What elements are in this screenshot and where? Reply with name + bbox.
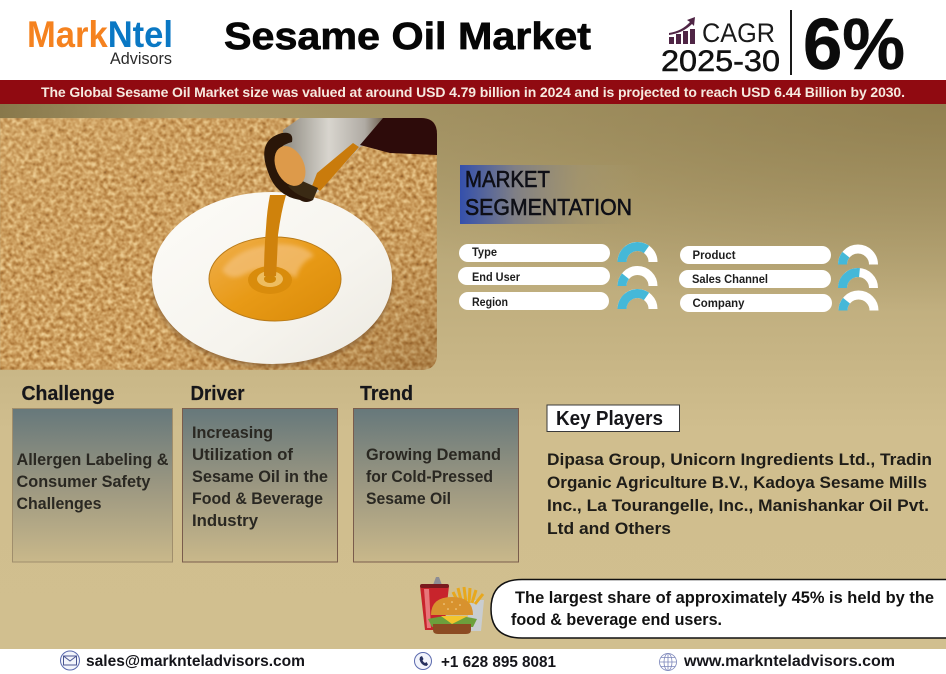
segment: Type: Type bbox=[472, 245, 497, 259]
segment: Product bbox=[680, 246, 874, 264]
driver card: Industry bbox=[192, 512, 259, 530]
title: Sesame Oil Market bbox=[224, 16, 591, 58]
key players list: Dipasa Group, Unicorn Ingredients Ltd., Tradin bbox=[547, 450, 932, 469]
panel: key players bbox=[547, 405, 932, 538]
driver card: Increasing bbox=[192, 424, 273, 442]
years: 2025-30 bbox=[661, 45, 780, 78]
key players heading: Key Players bbox=[556, 408, 663, 430]
challenge card: Challenges bbox=[16, 495, 102, 513]
icon: growth chart bbox=[669, 17, 695, 44]
driver card: Sesame Oil in the bbox=[192, 468, 328, 486]
callout: largest share: The largest share of approximately 45% is held by the bbox=[515, 589, 934, 607]
key players list: Ltd and Others bbox=[547, 519, 671, 538]
driver heading: Driver bbox=[190, 383, 245, 405]
segment: Region: Region bbox=[472, 295, 508, 309]
panel: driver bbox=[182, 383, 338, 562]
segment: End User bbox=[458, 267, 653, 286]
segment: Region bbox=[459, 292, 653, 310]
red summary banner bbox=[0, 80, 946, 104]
oil pool bbox=[209, 237, 341, 321]
logo: MarkNtel Advisors: MarkNtel bbox=[27, 14, 173, 55]
CAGR value: 6% bbox=[803, 5, 905, 85]
driver card: Food & Beverage bbox=[192, 490, 323, 508]
red summary banner: The Global Sesame Oil Market size was valued at around USD 4.79 billion in 2024 and is projected to reach USD 6.44 Billion by 2030. bbox=[41, 84, 905, 100]
segment: Sales Channel: Sales Channel bbox=[692, 272, 768, 286]
email contact: sales@marknteladvisors.com bbox=[86, 653, 305, 670]
website contact: www.marknteladvisors.com bbox=[683, 653, 895, 670]
trend heading: Trend bbox=[360, 383, 413, 405]
plate bbox=[152, 192, 392, 367]
segment: End User: End User bbox=[472, 270, 520, 284]
divider bbox=[790, 10, 792, 75]
segment: Type bbox=[459, 244, 653, 262]
key players list bbox=[547, 450, 932, 538]
challenge card bbox=[12, 408, 172, 562]
trend card: Sesame Oil bbox=[366, 490, 451, 508]
trend card: for Cold-Pressed bbox=[366, 468, 493, 486]
key players list: Organic Agriculture B.V., Kadoya Sesame Mills bbox=[547, 473, 927, 492]
panel: challenge bbox=[12, 383, 172, 562]
segmentation heading: SEGMENTATION bbox=[465, 194, 632, 220]
callout: largest share bbox=[491, 580, 946, 638]
phone contact: +1 628 895 8081 bbox=[441, 654, 556, 671]
panel: market segmentation bbox=[458, 165, 874, 312]
key players list: Inc., La Tourangelle, Inc., Manishankar Oil Pvt. bbox=[547, 496, 929, 515]
segmentation heading bbox=[460, 165, 642, 224]
icon: burger, drink and fries bbox=[420, 577, 484, 634]
logo: MarkNtel Advisors: Advisors bbox=[110, 49, 172, 68]
segmentation heading: MARKET bbox=[465, 166, 550, 192]
segment: Sales Channel bbox=[679, 270, 874, 288]
panel: trend bbox=[354, 383, 518, 562]
CAGR label: CAGR bbox=[702, 18, 775, 48]
driver card bbox=[182, 408, 338, 562]
oil stream bbox=[264, 195, 286, 276]
trend card: Growing Demand bbox=[366, 446, 501, 464]
driver card: Utilization of bbox=[192, 446, 294, 464]
sesame seeds bbox=[0, 118, 437, 370]
footer bbox=[0, 649, 946, 674]
challenge card: Consumer Safety bbox=[16, 473, 151, 491]
challenge card: Allergen Labeling & bbox=[16, 451, 169, 469]
segment: Product: Product bbox=[692, 248, 736, 262]
segment: Company bbox=[680, 294, 874, 312]
challenge heading: Challenge bbox=[22, 383, 114, 405]
segment: Company: Company bbox=[692, 296, 745, 310]
bottle bbox=[264, 118, 437, 202]
CAGR block bbox=[661, 5, 905, 85]
photo: sesame oil poured on a plate bbox=[0, 118, 437, 370]
trend card bbox=[354, 408, 518, 562]
callout: largest share: food & beverage end users. bbox=[511, 611, 722, 629]
